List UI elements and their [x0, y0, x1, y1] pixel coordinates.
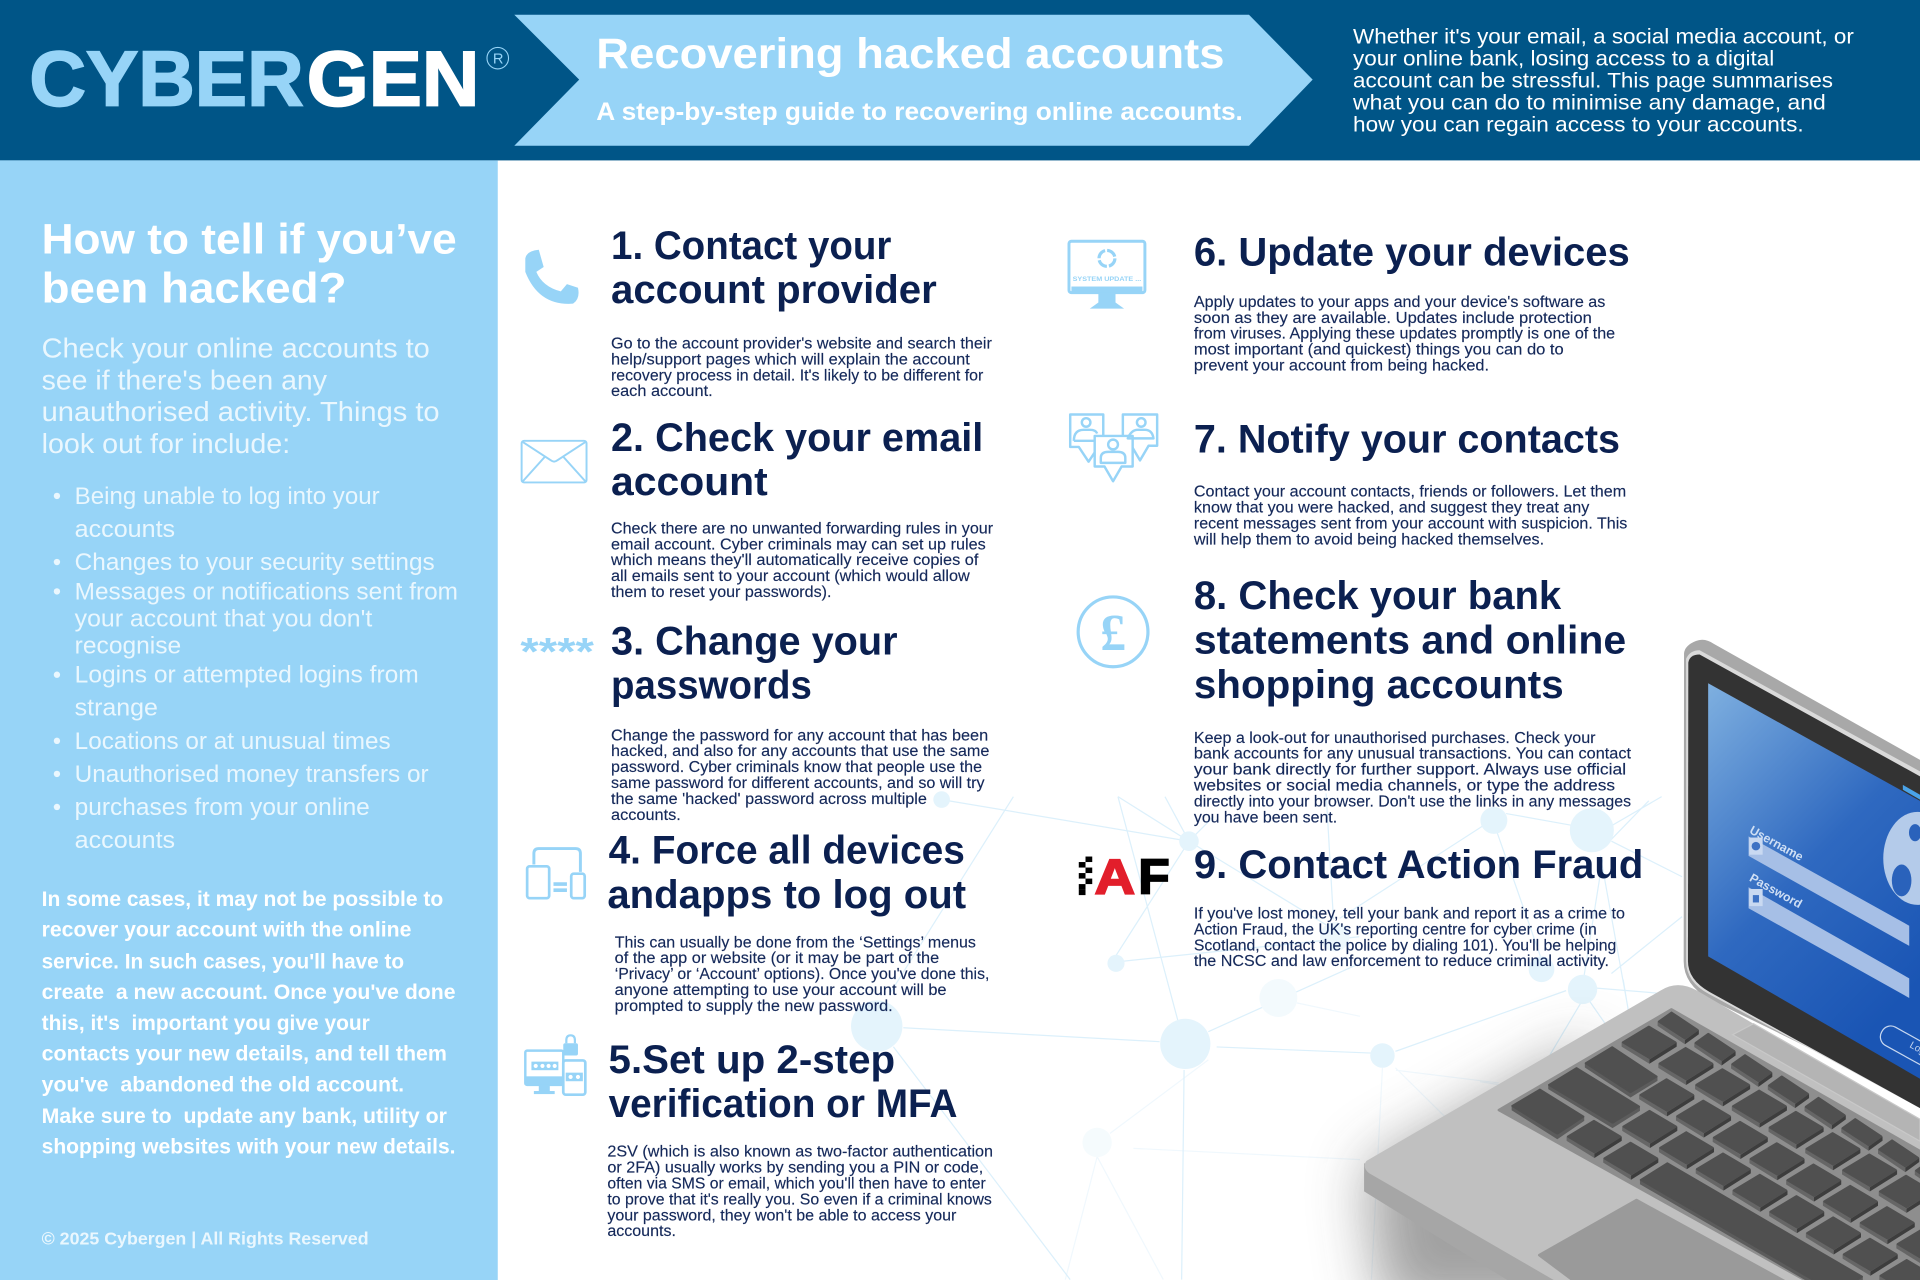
logo [29, 34, 509, 122]
step 8 body [1193, 729, 1632, 826]
icon: contacts speech bubbles [1070, 414, 1157, 481]
step 5 body: often via SMS or email, which you'll then have to enter [607, 1174, 986, 1192]
warning signs list: Locations or at unusual times [75, 728, 391, 755]
laptop keyboard [1512, 1013, 1920, 1280]
step 6 body: soon as they are available. Updates include protection [1194, 309, 1592, 327]
step 8 heading: shopping accounts [1194, 663, 1564, 707]
step 4 body: This can usually be done from the ‘Settings’ menus [615, 933, 976, 951]
step 4 body: prompted to supply the new password. [615, 997, 893, 1015]
step 4 body: anyone attempting to use your account will be [615, 981, 947, 999]
step 5 body: or 2FA) usually works by sending you a PIN or code, [607, 1159, 983, 1177]
laptop base [1364, 985, 1920, 1280]
recovery note: Make sure to update any bank, utility or [42, 1105, 447, 1128]
warning signs list: Messages or notifications sent from [75, 578, 458, 605]
recovery note: shopping websites with your new details. [42, 1135, 456, 1158]
panel heading: been hacked? [42, 264, 347, 312]
icon: devices [527, 849, 585, 898]
step 8 heading [1194, 574, 1626, 707]
step 2 body [610, 519, 994, 601]
step 7 [1070, 414, 1627, 548]
warning signs list [54, 483, 458, 854]
laptop lid and screen [1684, 640, 1920, 1108]
network background [851, 791, 1682, 1280]
step 3 heading: 3. Change your [611, 619, 898, 663]
warning signs list: accounts [75, 516, 175, 543]
step 4 heading: 4. Force all devices [609, 829, 965, 873]
step 1 body: help/support pages which will explain the account [611, 350, 970, 368]
step 8 body: you have been sent. [1194, 808, 1337, 826]
step 9 body [1194, 904, 1625, 970]
header band [0, 0, 1920, 160]
step 5 heading: verification or MFA [609, 1082, 958, 1126]
step 8 [1078, 574, 1632, 826]
logo: CYBER [29, 34, 304, 122]
intro text: account can be stressful. This page summarises [1353, 69, 1833, 93]
step 3 heading [611, 619, 898, 707]
laptop illustration [1364, 640, 1920, 1280]
step 9 body: the NCSC and law enforcement to reduce criminal activity. [1194, 952, 1609, 970]
logo: GEN [307, 34, 479, 122]
step 5 body: to prove that it's really you. So even if a criminal knows [607, 1190, 992, 1208]
title arrow banner [514, 15, 1313, 146]
step 8 body: websites or social media channels, or type the address [1193, 777, 1615, 795]
step 7 body: recent messages sent from your account with suspicion. This [1194, 514, 1627, 532]
intro text: your online bank, losing access to a digital [1353, 47, 1774, 71]
step 5 body: accounts. [607, 1222, 676, 1240]
recovery note: contacts your new details, and tell them [42, 1042, 447, 1065]
recovery note: create a new account. Once you've done [42, 981, 456, 1004]
step 8 heading: 8. Check your bank [1194, 574, 1562, 618]
warning signs list: accounts [75, 827, 175, 854]
panel heading: How to tell if you’ve [42, 215, 457, 263]
step 6 body [1194, 293, 1615, 375]
step 3 heading: passwords [611, 663, 812, 707]
icon: system update monitor [1069, 241, 1145, 309]
step 9 body: Action Fraud, the UK's reporting centre for cyber crime (in [1194, 920, 1597, 938]
step 3 body: Change the password for any account that has been [611, 726, 988, 744]
step 2 body: which means they'll automatically receive copies of [610, 551, 979, 569]
intro text [1352, 24, 1854, 137]
recovery note [42, 888, 456, 1158]
warning signs list: strange [75, 695, 158, 722]
warning signs list: Being unable to log into your [75, 483, 380, 510]
panel intro: unauthorised activity. Things to [42, 396, 440, 427]
logo: R [493, 52, 503, 68]
step 3 body [611, 726, 989, 824]
step 6 [1069, 231, 1630, 375]
step 7 heading: 7. Notify your contacts [1194, 417, 1620, 461]
recovery note: recover your account with the online [42, 919, 411, 942]
step 6 body: from viruses. Applying these updates promptly is one of the [1194, 325, 1615, 343]
step 2 heading [611, 416, 983, 504]
step 1 body: each account. [611, 382, 713, 400]
step 3 body: hacked, and also for any accounts that use the same [611, 742, 989, 760]
step 4 heading [607, 829, 966, 917]
laptop lid and screen: Username [1747, 823, 1806, 864]
warning signs list: recognise [75, 632, 181, 659]
icon: Action Fraud logo: A [1095, 851, 1135, 905]
warning signs list: Logins or attempted logins from [75, 662, 419, 689]
recovery note: service. In such cases, you'll have to [42, 951, 404, 974]
icon: system update monitor: SYSTEM UPDATE ... [1073, 276, 1141, 283]
step 4 body [615, 933, 989, 1015]
step 6 body: Apply updates to your apps and your device's software as [1194, 293, 1605, 311]
step 8 heading: statements and online [1194, 619, 1626, 663]
step 4 body: of the app or website (or it may be part of the [615, 949, 939, 967]
step 5 body: 2SV (which is also known as two-factor authentication [607, 1143, 993, 1161]
step 5 [525, 1035, 993, 1240]
warning signs list: Unauthorised money transfers or [75, 761, 429, 788]
warning signs list: Changes to your security settings [75, 549, 435, 576]
step 8 body: Keep a look-out for unauthorised purchases. Check your [1194, 729, 1596, 747]
step 2 body: email account. Cyber criminals may can set up rules [611, 535, 986, 553]
icon: Action Fraud logo [1079, 851, 1170, 905]
step 2 heading: account [611, 460, 768, 504]
icon: password asterisks: **** [520, 631, 595, 674]
panel intro [42, 333, 440, 459]
step 7 body: Contact your account contacts, friends or followers. Let them [1194, 483, 1626, 501]
step 1 heading: 1. Contact your [611, 224, 891, 268]
step 1 body: recovery process in detail. It's likely to be different for [611, 366, 984, 384]
step 5 body: your password, they won't be able to access your [607, 1206, 957, 1224]
step 9 [1079, 843, 1643, 970]
icon: pound coin: £ [1100, 605, 1126, 662]
step 1 body: Go to the account provider's website and search their [611, 334, 992, 352]
panel intro: Check your online accounts to [42, 333, 430, 364]
recovery note: In some cases, it may not be possible to [42, 888, 443, 911]
step 4 heading: andapps to log out [607, 873, 966, 917]
intro text: how you can regain access to your accounts. [1353, 113, 1804, 137]
step 4 body: ‘Privacy’ or ‘Account’ options). Once you've done this, [615, 965, 989, 983]
step 5 body [607, 1143, 993, 1240]
laptop shadow [1364, 1041, 1616, 1280]
icon: phone [525, 250, 579, 304]
icon: two-step lock and devices [525, 1035, 585, 1095]
panel heading [42, 215, 457, 312]
step 6 body: most important (and quickest) things you can do to [1194, 341, 1564, 359]
panel intro: look out for include: [42, 428, 290, 459]
step 1 [525, 224, 992, 400]
step 6 body: prevent your account from being hacked. [1194, 357, 1489, 375]
step 9 heading: 9. Contact Action Fraud [1194, 843, 1643, 887]
intro text: Whether it's your email, a social media account, or [1353, 24, 1854, 48]
step 2 [522, 416, 994, 601]
panel: how to tell if hacked [0, 160, 498, 1280]
step 3 body: password. Cyber criminals know that people use the [611, 758, 982, 776]
warning signs list: your account that you don't [75, 605, 373, 632]
step 5 heading [609, 1038, 958, 1126]
step 8 body: bank accounts for any unusual transactions. You can contact [1194, 745, 1632, 763]
copyright: © 2025 Cybergen | All Rights Reserved [42, 1229, 369, 1249]
step 2 body: them to reset your passwords). [611, 583, 831, 601]
step 5 heading: 5.Set up 2-step [609, 1038, 895, 1082]
warning signs list: purchases from your online [75, 794, 370, 821]
title: Recovering hacked accounts [596, 30, 1224, 78]
icon: pound coin [1078, 597, 1148, 667]
step 1 heading: account provider [611, 268, 937, 312]
step 7 body: will help them to avoid being hacked themselves. [1193, 530, 1544, 548]
step 8 body: directly into your browser. Don't use the links in any messages [1194, 792, 1631, 810]
step 1 body [611, 334, 992, 400]
step 9 body: If you've lost money, tell your bank and report it as a crime to [1194, 904, 1625, 922]
step 2 body: Check there are no unwanted forwarding rules in your [611, 519, 994, 537]
step 6 heading: 6. Update your devices [1194, 231, 1630, 275]
step 3 body: the same 'hacked' password across multiple [611, 790, 927, 808]
step 7 body [1193, 483, 1627, 548]
step 8 body: your bank directly for further support. Always use official [1194, 761, 1626, 779]
icon: Action Fraud logo: F [1138, 851, 1170, 905]
recovery note: this, it's important you give your [42, 1012, 370, 1035]
step 3 body: accounts. [611, 806, 681, 824]
intro text: what you can do to minimise any damage, and [1352, 91, 1826, 115]
step 9 body: Scotland, contact the police by dialing 101). You'll be helping [1194, 936, 1616, 954]
icon: envelope [522, 441, 587, 482]
step 1 heading [611, 224, 937, 312]
recovery note: you've abandoned the old account. [42, 1074, 404, 1097]
step 3 [520, 619, 989, 824]
subtitle: A step-by-step guide to recovering online accounts. [596, 98, 1243, 126]
laptop lid and screen: Password [1747, 871, 1804, 911]
step 2 body: all emails sent to your account (which would allow [611, 567, 970, 585]
step 4 [527, 829, 989, 1015]
step 3 body: same password for different accounts, and so will try [611, 774, 984, 792]
step 2 heading: 2. Check your email [611, 416, 983, 460]
panel intro: see if there's been any [42, 364, 328, 395]
step 7 body: know that you were hacked, and suggest they treat any [1194, 499, 1589, 517]
